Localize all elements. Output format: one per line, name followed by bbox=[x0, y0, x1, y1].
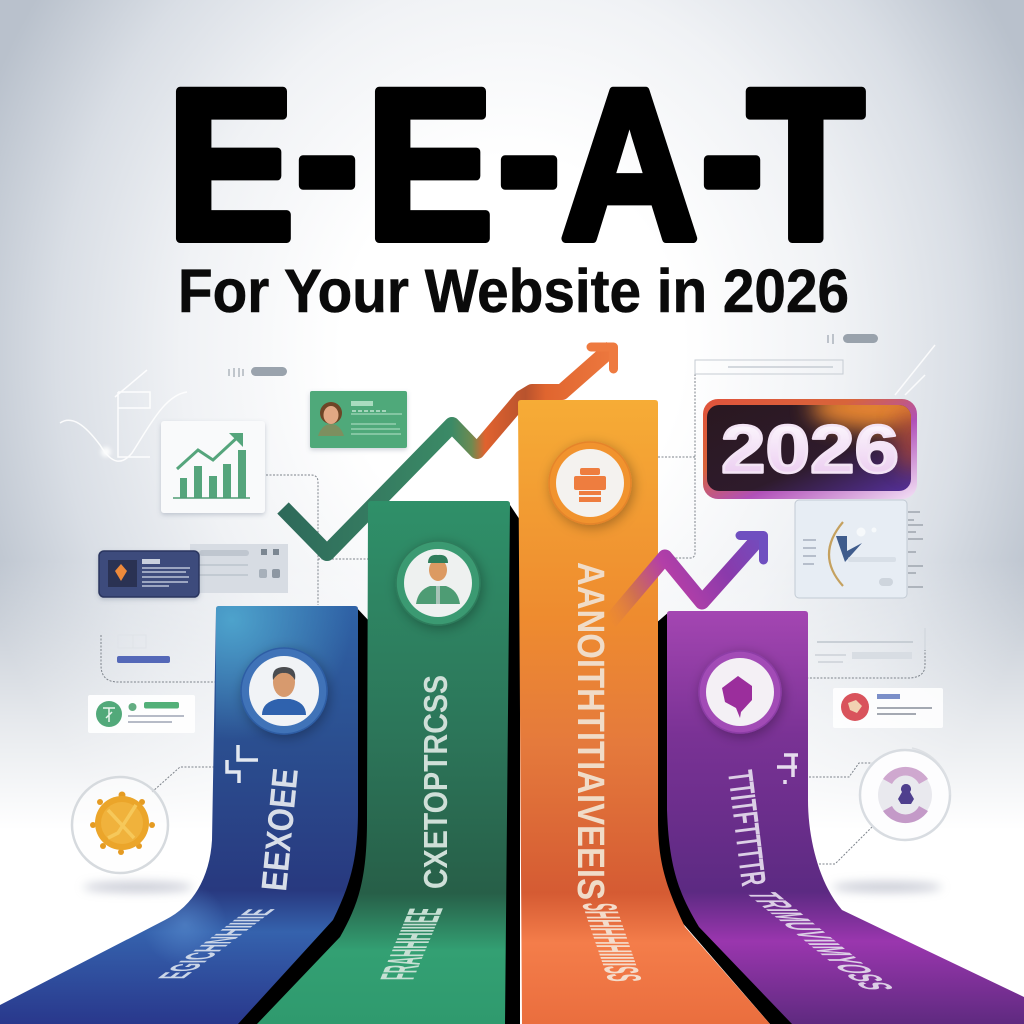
column mark bbox=[777, 755, 798, 784]
column: green E: FRAHHHIIIEE bbox=[371, 908, 454, 980]
badge text: 2026 bbox=[721, 412, 899, 488]
purple arrow bbox=[610, 536, 764, 622]
top right pill bbox=[828, 334, 878, 344]
icon: gold medal bbox=[72, 777, 168, 873]
card: right check panel bbox=[795, 500, 923, 598]
shadows under left and right rings bbox=[83, 882, 942, 892]
L bracket bar bbox=[117, 635, 170, 663]
chip: green bbox=[88, 695, 195, 733]
column: blue E bbox=[0, 606, 358, 1024]
column: green E bbox=[257, 501, 510, 1024]
column: purple T bbox=[667, 611, 1024, 1024]
badge: purple icon bbox=[699, 651, 781, 733]
badge: blue person bbox=[241, 648, 327, 734]
card: green ID bbox=[310, 391, 407, 448]
connectors bbox=[101, 374, 925, 864]
avatar bbox=[318, 402, 344, 436]
green zigzag arrow bbox=[283, 347, 614, 553]
badge: 2026 bbox=[703, 399, 917, 499]
decorative glow right bbox=[895, 345, 935, 395]
title: E-E-A-T bbox=[167, 35, 864, 284]
badge: green person bbox=[396, 541, 480, 625]
outline panel top right bbox=[695, 360, 843, 374]
badge: orange icon bbox=[549, 442, 631, 524]
card: gray panel behind dark card bbox=[190, 544, 288, 593]
column: blue E: EGICHNHIIIIE bbox=[150, 909, 284, 979]
chip: red bbox=[833, 688, 943, 728]
card: dark blue bbox=[99, 551, 199, 597]
vertical label: CXETOPTRCSS bbox=[417, 675, 454, 889]
column: orange A bbox=[518, 400, 770, 1024]
shadows between columns bbox=[234, 502, 794, 1024]
subtitle: For Your Website in 2026 bbox=[178, 257, 849, 325]
decorative glow sketch left bbox=[60, 370, 187, 461]
top left pill bbox=[229, 367, 287, 377]
column mark bbox=[227, 745, 258, 783]
upper label: TTITFTTTTR bbox=[720, 768, 773, 888]
right lines panel bbox=[815, 628, 925, 662]
icon: purple ring bbox=[860, 748, 950, 840]
vertical label: AANOITHTITIAIVEEIS bbox=[569, 562, 611, 900]
card: growth chart bbox=[161, 421, 265, 513]
vertical label: EEXOEE bbox=[253, 766, 306, 893]
